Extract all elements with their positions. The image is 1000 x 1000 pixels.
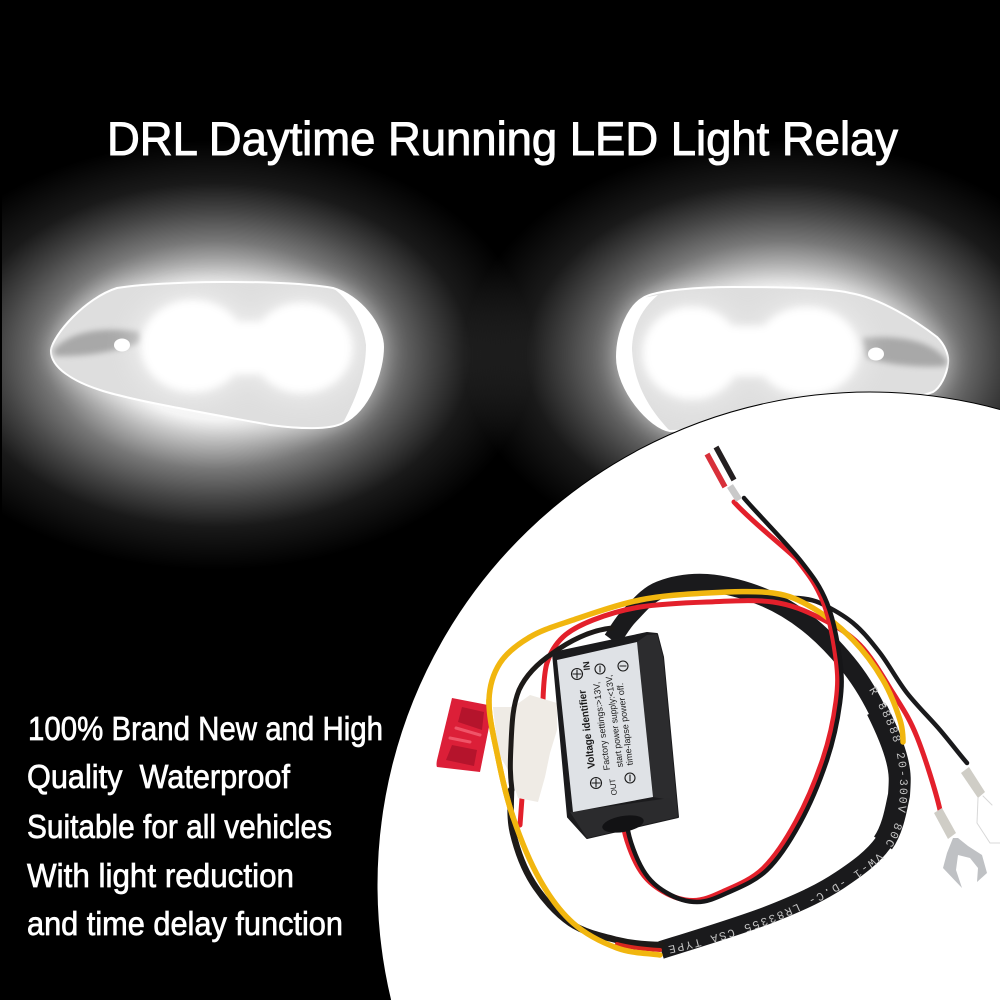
feature list: and time delay function [27, 905, 343, 942]
white fuse holder [493, 695, 557, 802]
feature list: 100% Brand New and High [28, 710, 383, 747]
feature list: Suitable for all vehicles [27, 808, 332, 845]
right LED lamp [617, 287, 948, 431]
fork terminal: black wire [961, 767, 1000, 843]
right lamp wide glow [465, 140, 1000, 570]
black wire in two-core loop [627, 498, 842, 902]
red wire stub below holder [520, 798, 522, 825]
white circle panel [377, 392, 1000, 1000]
circle outline [377, 392, 1000, 1000]
left lamp wide glow [0, 140, 535, 570]
feature list: With light reduction [27, 857, 294, 894]
yellow wire over holder [489, 700, 513, 817]
ring-terminal black wire [795, 598, 967, 763]
red wire upper [543, 601, 940, 810]
lower black wire to sleeve [511, 790, 662, 945]
red sliver at sleeve [617, 944, 660, 950]
fuse [436, 698, 489, 772]
relay label: time-lapse power off. [615, 682, 635, 766]
stripped wire tips [707, 447, 739, 500]
title: DRL Daytime Running LED Light Relay [107, 112, 898, 165]
thick black cable [612, 583, 900, 950]
left edge strip [0, 0, 2, 1000]
feature list: Quality Waterproof [27, 758, 291, 795]
red wire in two-core loop [623, 502, 838, 900]
relay product: wiring harness [436, 446, 1000, 959]
relay label: Voltage identifier [576, 689, 598, 769]
black wire from relay across holder [510, 628, 612, 790]
cable bulge [877, 710, 900, 843]
relay box [553, 633, 678, 838]
relay label: IN [581, 661, 592, 671]
yellow wire [489, 592, 903, 955]
left lamp tight halo [51, 282, 383, 428]
relay label: OUT [608, 778, 619, 796]
feature list [27, 710, 383, 942]
fork terminal: red wire [934, 808, 987, 888]
left LED lamp [51, 282, 383, 428]
relay label: start power supply:<13V, [604, 674, 625, 768]
relay label: Factory settings:>13V, [591, 681, 612, 771]
relay label [557, 642, 653, 812]
right lamp tight halo [617, 287, 948, 431]
cable printing: R 88888 20-300V 80C VW-1 -D.C- LR83355 CSA TYPE [668, 686, 908, 954]
